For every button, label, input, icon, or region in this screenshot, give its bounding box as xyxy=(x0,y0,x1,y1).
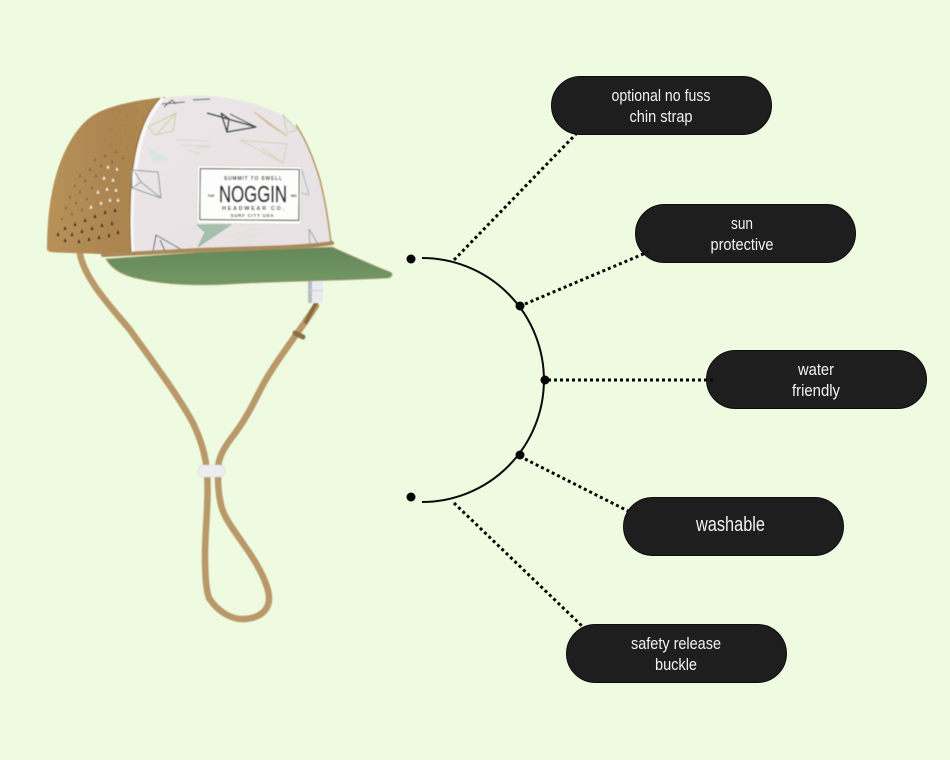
patch text: surf city usa: SURF CITY USA xyxy=(230,213,274,218)
feature pill: washable: washable xyxy=(695,514,765,536)
feature pill: sun protective: protective xyxy=(710,235,774,254)
patch text: noggin: NOGGIN xyxy=(219,181,287,207)
feature pill: safety release buckle xyxy=(566,624,786,682)
release buckle xyxy=(308,277,323,303)
strap slider clip xyxy=(198,465,225,477)
top plane xyxy=(162,100,185,107)
feature pill: safety release buckle: safety release xyxy=(631,634,721,653)
patch text: the: THE xyxy=(208,193,215,198)
dotted connector: safety buckle xyxy=(454,503,583,627)
feature pill: water friendly: water xyxy=(797,360,834,379)
feature pill: water friendly: friendly xyxy=(792,381,840,400)
mint plane xyxy=(147,146,170,163)
feature pill: optional no fuss chin strap: chin strap xyxy=(630,107,692,126)
dotted connector: chin strap xyxy=(454,134,576,260)
feature pill: sun protective: sun xyxy=(731,214,753,233)
chin strap xyxy=(80,254,316,619)
arc end dot bottom xyxy=(406,492,416,502)
front panel seam xyxy=(132,98,163,253)
paper plane print xyxy=(132,99,319,252)
arc node middle xyxy=(540,376,550,384)
cap rope band xyxy=(103,243,332,255)
right plane xyxy=(298,170,309,195)
patch text: summit to swell: SUMMIT TO SWELL xyxy=(224,176,282,182)
feature pill: sun protective xyxy=(636,204,856,262)
feature pill: safety release buckle: buckle xyxy=(655,655,697,674)
connector arc xyxy=(422,258,544,502)
green outline plane xyxy=(148,113,176,135)
arc node lower xyxy=(516,450,524,460)
product: cap with chin strap xyxy=(47,96,392,619)
faint hatch plane xyxy=(176,140,212,154)
pale plane xyxy=(240,140,287,163)
cap front panel xyxy=(132,96,330,253)
dotted connector: washable xyxy=(525,459,628,511)
woven logo patch xyxy=(197,166,301,224)
dotted connector: sun protective xyxy=(525,252,648,304)
feature pill: washable xyxy=(624,498,844,556)
left plane xyxy=(132,170,161,198)
bottom planes xyxy=(197,224,232,247)
patch text: inc: INC xyxy=(291,193,297,198)
arc node upper xyxy=(516,302,524,310)
arc end dot top xyxy=(406,254,416,264)
ventilation holes xyxy=(56,107,149,243)
cap visor xyxy=(106,247,392,285)
cap side mesh panel xyxy=(47,97,170,254)
tan plane xyxy=(254,112,287,136)
feature pill: optional no fuss chin strap: optional no fuss xyxy=(612,86,710,105)
dotted connector: water friendly xyxy=(548,378,714,382)
patch text: headwear co: HEADWEAR CO. xyxy=(222,206,284,212)
feature pill: optional no fuss chin strap xyxy=(552,76,772,134)
feature pill: water friendly xyxy=(706,350,926,408)
dark plane xyxy=(207,113,256,132)
